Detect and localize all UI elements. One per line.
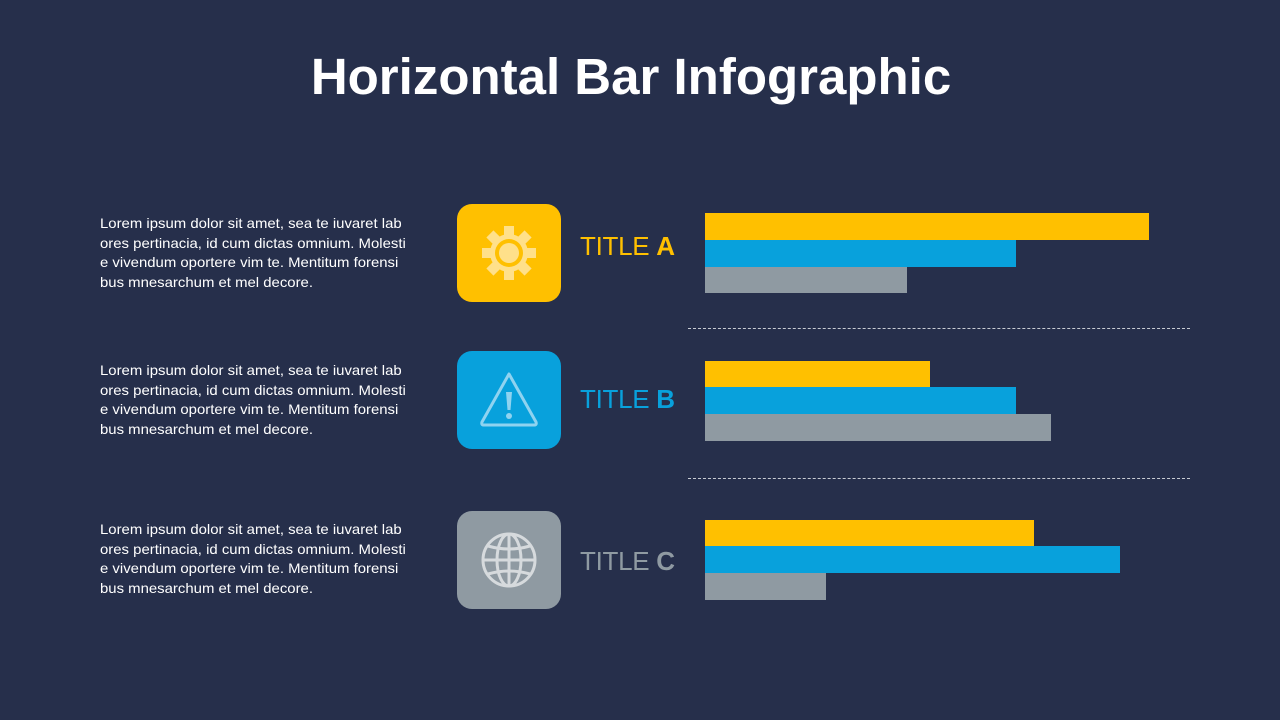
text block A	[100, 215, 406, 290]
text block B	[100, 362, 406, 437]
bar chart B	[705, 361, 1051, 441]
title B: TITLE B	[580, 384, 675, 414]
text block C	[100, 521, 406, 596]
title A: TITLE A	[580, 231, 675, 261]
text block C: Lorem ipsum dolor sit amet, sea te iuvaret lab	[100, 521, 402, 537]
text block B: e vivendum oportere vim te. Mentitum forensi	[100, 401, 398, 417]
text block C: e vivendum oportere vim te. Mentitum forensi	[100, 560, 398, 576]
text block C: ores pertinacia, id cum dictas omnium. Molesti	[100, 541, 406, 557]
title C: TITLE C	[580, 546, 675, 576]
text block A: ores pertinacia, id cum dictas omnium. Molesti	[100, 235, 406, 251]
text block B: Lorem ipsum dolor sit amet, sea te iuvaret lab	[100, 362, 402, 378]
text block A: Lorem ipsum dolor sit amet, sea te iuvaret lab	[100, 215, 402, 231]
text block C: bus mnesarchum et mel decore.	[100, 580, 313, 596]
text block A: e vivendum oportere vim te. Mentitum forensi	[100, 254, 398, 270]
text block A: bus mnesarchum et mel decore.	[100, 274, 313, 290]
text block B: ores pertinacia, id cum dictas omnium. Molesti	[100, 382, 406, 398]
title: Horizontal Bar Infographic	[311, 48, 951, 105]
icon: globe	[457, 511, 561, 609]
bar chart A	[705, 213, 1149, 293]
bar chart C	[705, 520, 1120, 600]
text block B: bus mnesarchum et mel decore.	[100, 421, 313, 437]
icon: gear	[457, 204, 561, 302]
icon: warning	[457, 351, 561, 449]
